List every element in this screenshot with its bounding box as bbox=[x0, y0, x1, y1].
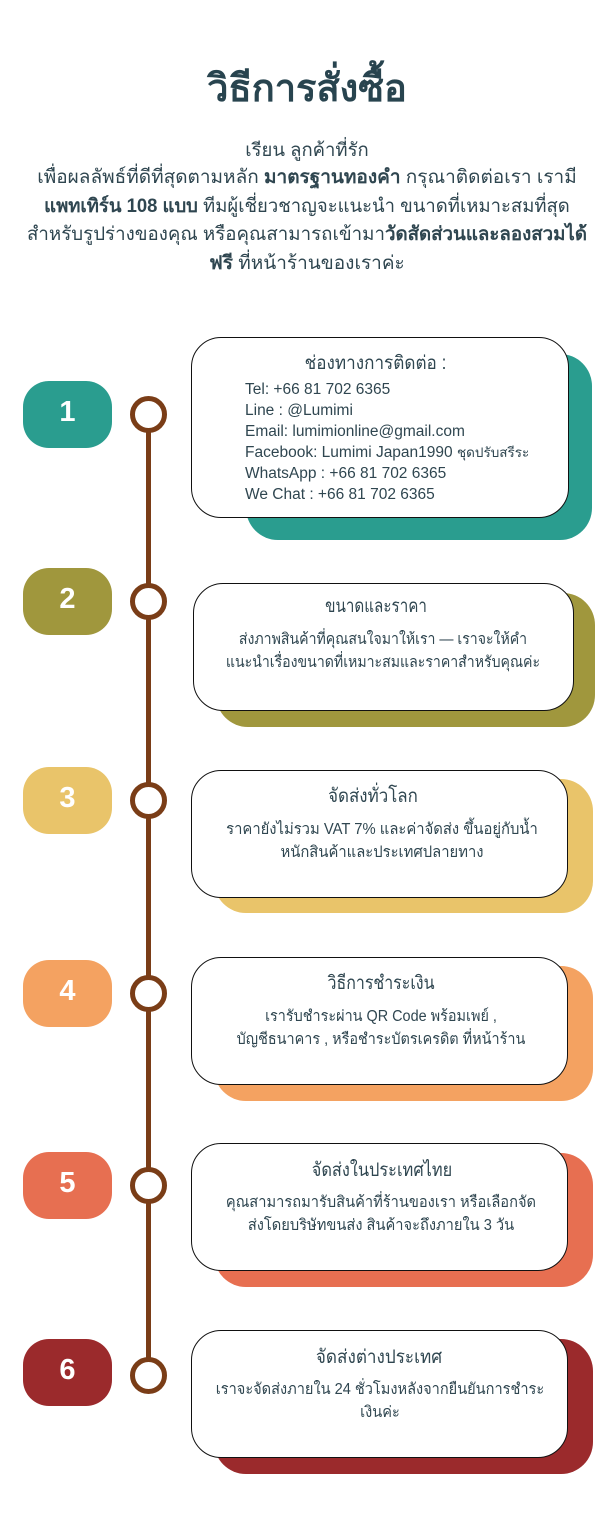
step 6 heading: จัดส่งต่างประเทศ bbox=[316, 1347, 442, 1368]
step 3 text bbox=[226, 818, 538, 861]
step 4 heading: วิธีการชำระเงิน bbox=[327, 973, 434, 994]
step 2 badge bbox=[23, 568, 112, 635]
step 1 contact list: WhatsApp : +66 81 702 6365 bbox=[245, 465, 446, 482]
step 5 card shadow bbox=[214, 1153, 593, 1287]
step 5 text bbox=[226, 1191, 536, 1234]
intro text block: สำหรับรูปร่างของคุณ หรือคุณสามารถเข้ามาวัดสัดส่วนและลองสวมได้ bbox=[27, 224, 587, 245]
intro text block: เพื่อผลลัพธ์ที่ดีที่สุดตามหลัก มาตรฐานทองคำ กรุณาติดต่อเรา เรามี bbox=[37, 167, 577, 188]
intro text block: เรียน ลูกค้าที่รัก bbox=[245, 139, 369, 160]
step 1 contact list: We Chat : +66 81 702 6365 bbox=[245, 486, 435, 503]
step 6 card shadow bbox=[214, 1339, 593, 1474]
step 6 timeline node bbox=[130, 1357, 167, 1394]
step 4 card bbox=[191, 957, 568, 1085]
step 5 text: ส่งโดยบริษัทขนส่ง สินค้าจะถึงภายใน 3 วัน bbox=[248, 1217, 514, 1234]
step 2 timeline node bbox=[130, 583, 167, 620]
step 3 card bbox=[191, 770, 568, 898]
step 2 text: ส่งภาพสินค้าที่คุณสนใจมาให้เรา — เราจะให้คำ bbox=[239, 631, 527, 648]
step 5 text: คุณสามารถมารับสินค้าที่ร้านของเรา หรือเลือกจัด bbox=[226, 1194, 536, 1211]
step 1 heading: ช่องทางการติดต่อ : bbox=[305, 353, 446, 374]
step 3 text: ราคายังไม่รวม VAT 7% และค่าจัดส่ง ขึ้นอยู่กับน้ำ bbox=[226, 821, 538, 838]
step 5 timeline node bbox=[130, 1167, 167, 1204]
intro text block: แพทเทิร์น 108 แบบ ทีมผู้เชี่ยวชาญจะแนะนำ ขนาดที่เหมาะสมที่สุด bbox=[44, 196, 570, 217]
step 4 card shadow bbox=[214, 966, 593, 1101]
step 6 text: เงินค่ะ bbox=[360, 1404, 400, 1421]
step 2 text: แนะนำเรื่องขนาดที่เหมาะสมและราคาสำหรับคุณค่ะ bbox=[226, 654, 540, 671]
step 3 timeline node bbox=[130, 782, 167, 819]
intro text block bbox=[27, 136, 587, 274]
step 1 badge: 1 bbox=[59, 396, 76, 428]
step 6 text bbox=[216, 1378, 544, 1421]
step 5 badge: 5 bbox=[59, 1167, 76, 1199]
step 6 card bbox=[191, 1330, 568, 1458]
step 1 card shadow bbox=[246, 354, 592, 540]
step 5 heading: จัดส่งในประเทศไทย bbox=[312, 1160, 452, 1181]
step 2 badge: 2 bbox=[59, 583, 76, 615]
step 4 badge bbox=[23, 960, 112, 1027]
step 3 badge: 3 bbox=[59, 782, 76, 814]
step 5 card bbox=[191, 1143, 568, 1271]
step 3 card shadow bbox=[214, 779, 593, 913]
title: วิธีการสั่งซื้อ bbox=[207, 68, 407, 110]
step 1 contact list: Facebook: Lumimi Japan1990 ชุดปรับสรีระ bbox=[245, 444, 529, 461]
step 3 text: หนักสินค้าและประเทศปลายทาง bbox=[280, 844, 484, 861]
step 1 timeline node bbox=[130, 396, 167, 433]
step 4 text: เรารับชำระผ่าน QR Code พร้อมเพย์ , bbox=[265, 1008, 497, 1025]
timeline line bbox=[146, 420, 150, 1365]
step 6 text: เราจะจัดส่งภายใน 24 ชั่วโมงหลังจากยืนยันการชำระ bbox=[216, 1381, 544, 1398]
step 1 badge bbox=[23, 381, 112, 448]
step 3 badge bbox=[23, 767, 112, 834]
step 1 card bbox=[191, 337, 569, 518]
step 1 contact list: Tel: +66 81 702 6365 bbox=[245, 381, 390, 398]
step 5 badge bbox=[23, 1152, 112, 1219]
step 4 text bbox=[237, 1007, 525, 1048]
step 1 contact list bbox=[245, 381, 529, 503]
step 3 heading: จัดส่งทั่วโลก bbox=[328, 786, 418, 807]
step 2 heading: ขนาดและราคา bbox=[325, 596, 427, 617]
step 2 text bbox=[226, 628, 540, 672]
step 1 contact list: Line : @Lumimi bbox=[245, 402, 353, 419]
step 4 badge: 4 bbox=[59, 975, 76, 1007]
intro text block: ฟรี ที่หน้าร้านของเราค่ะ bbox=[209, 253, 405, 274]
step 6 badge bbox=[23, 1339, 112, 1406]
step 1 contact list: Email: lumimionline@gmail.com bbox=[245, 423, 465, 440]
step 4 text: บัญชีธนาคาร , หรือชำระบัตรเครดิต ที่หน้าร้าน bbox=[237, 1031, 525, 1048]
step 2 card bbox=[193, 583, 574, 711]
step 2 card shadow bbox=[216, 593, 595, 727]
step 6 badge: 6 bbox=[59, 1354, 76, 1386]
step 4 timeline node bbox=[130, 975, 167, 1012]
